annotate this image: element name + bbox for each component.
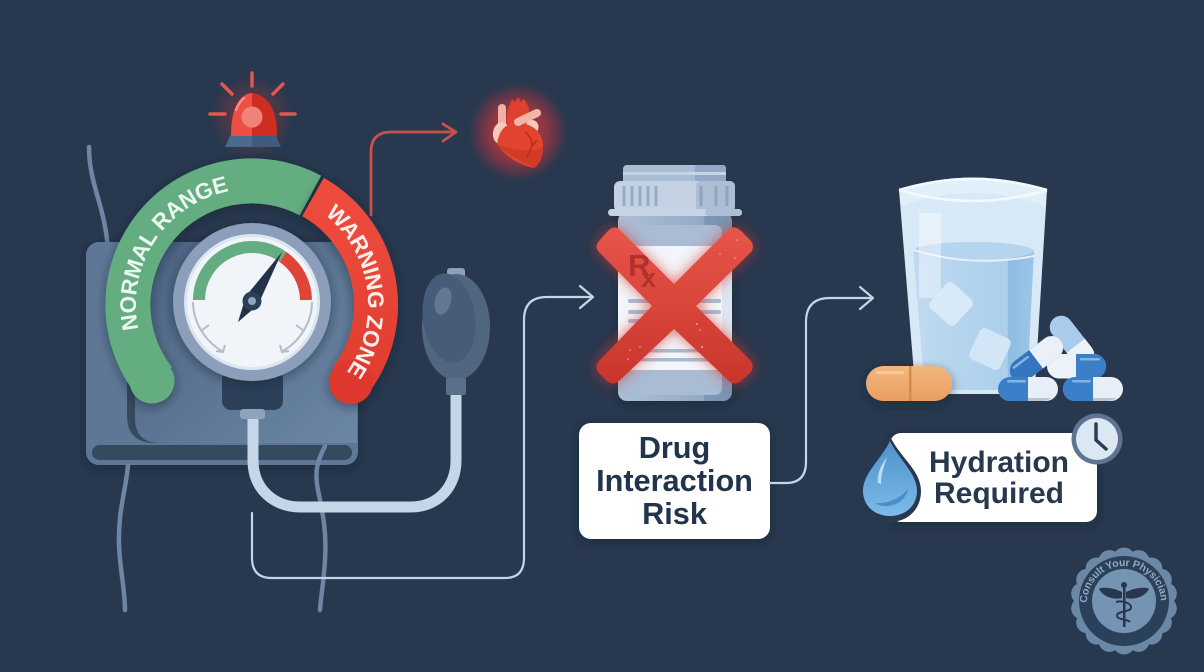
capsule: tilted — [1005, 331, 1068, 387]
pressure gauge dial — [173, 223, 331, 381]
range arc: normal range — [100, 158, 322, 412]
water — [913, 250, 1034, 390]
bulb pump — [417, 268, 490, 395]
capsule: upper tilted — [1045, 311, 1099, 371]
prescription bottle — [596, 165, 753, 401]
dial green segment — [199, 247, 283, 300]
X speckles — [627, 239, 738, 360]
Rx mark: x — [641, 263, 656, 293]
capsule: bottom left — [998, 377, 1058, 401]
left vessel — [498, 108, 506, 128]
rubber tube — [253, 392, 456, 507]
Rx mark: R — [628, 248, 650, 283]
cuff lower opening — [92, 445, 352, 460]
ice cube one — [927, 280, 975, 328]
gauge connector — [222, 370, 283, 419]
capsule: bottom right — [1063, 377, 1123, 401]
wire: lower right — [316, 446, 325, 610]
label: warning zone: WARNING ZONE — [328, 203, 384, 380]
Rx mark — [628, 248, 656, 293]
warning arrow to heart — [371, 124, 456, 215]
orange tablet — [866, 366, 952, 401]
callout: drug interaction risk: Drug — [639, 430, 710, 465]
wire: upper left — [89, 147, 108, 250]
icon: water drop — [859, 436, 921, 522]
dial red segment — [283, 257, 306, 300]
bottle cap — [608, 165, 742, 216]
icon: clock — [1072, 414, 1122, 464]
icon: caduceus — [1099, 582, 1149, 627]
range arc: warning zone — [299, 178, 399, 412]
connector arrow: drug risk to hydration — [770, 287, 873, 483]
capsule: middle horizontal — [1047, 354, 1106, 378]
heart icon with glow — [468, 82, 568, 182]
bottle label — [618, 246, 732, 370]
red X — [596, 227, 753, 384]
callout: hydration required — [890, 433, 1097, 522]
wire: lower left — [119, 465, 128, 610]
stamp text: Consult Your Physician — [1080, 560, 1166, 602]
ice cube two — [967, 326, 1013, 372]
alarm rays — [210, 73, 295, 114]
dial ticks — [193, 302, 312, 352]
callout: hydration required: Hydration — [929, 446, 1069, 479]
heart body — [497, 123, 543, 168]
callout: drug interaction risk: Interaction — [596, 463, 753, 498]
label: normal range: NORMAL RANGE — [120, 176, 228, 330]
callout: drug interaction risk — [579, 423, 770, 539]
stamp: consult your physician — [1071, 548, 1177, 654]
blood pressure cuff — [86, 242, 358, 465]
callout: hydration required: Required — [934, 477, 1064, 510]
cuff inner panel — [127, 242, 357, 443]
glass of water — [899, 178, 1047, 394]
glass highlight — [919, 213, 941, 298]
needle — [238, 252, 282, 322]
bottle body — [618, 212, 732, 401]
aorta — [507, 97, 530, 126]
vessel branch — [518, 113, 537, 122]
connector arrow: cuff to drug risk — [252, 286, 593, 578]
callout: drug interaction risk: Risk — [642, 496, 708, 531]
capsule pile — [998, 311, 1123, 401]
alarm beacon — [210, 73, 295, 159]
